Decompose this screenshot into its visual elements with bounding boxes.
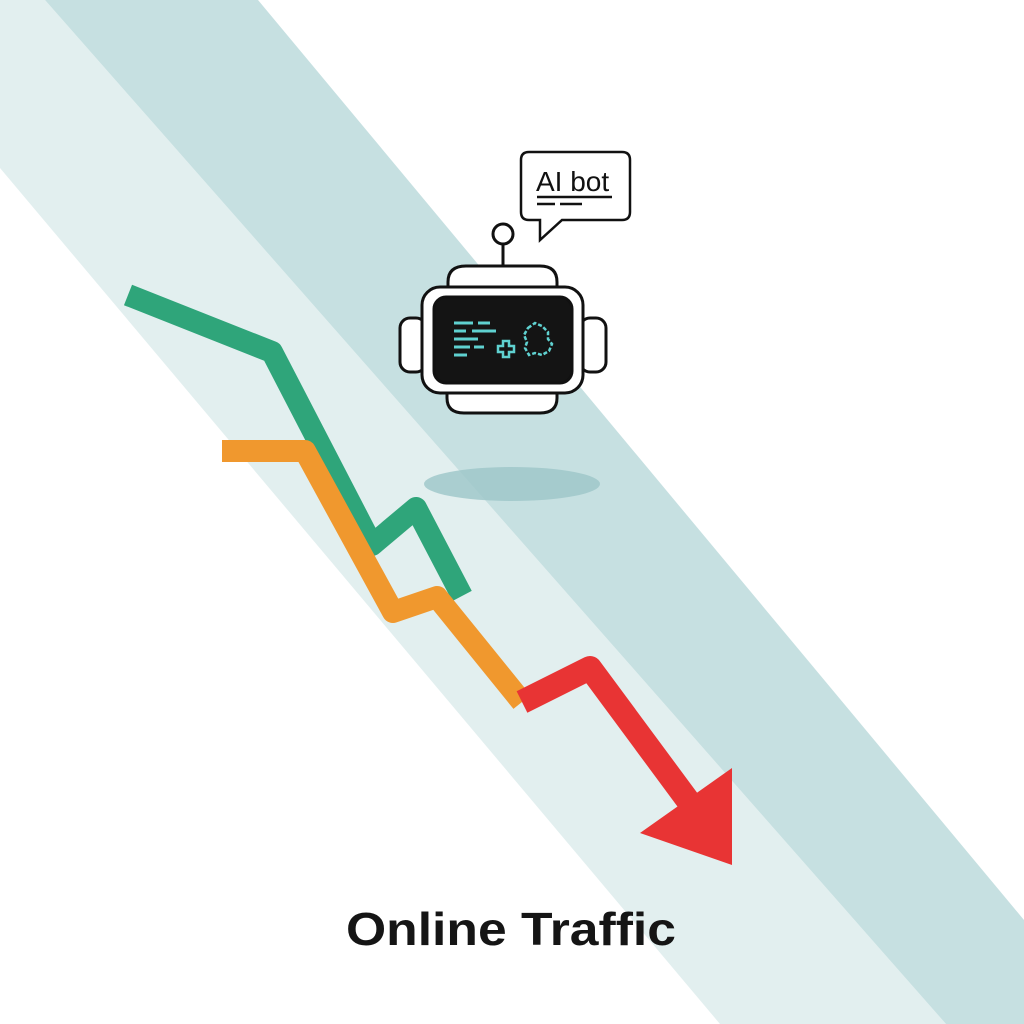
speech bubble: AI bot [521, 152, 630, 240]
robot icon [400, 224, 606, 413]
orange line [222, 451, 522, 702]
red arrow [522, 668, 732, 865]
title: Online Traffic [346, 903, 676, 955]
speech bubble: AI bot: AI bot [536, 166, 609, 197]
line chart [128, 295, 732, 865]
shadow ellipse [424, 467, 600, 501]
green line [128, 295, 462, 596]
